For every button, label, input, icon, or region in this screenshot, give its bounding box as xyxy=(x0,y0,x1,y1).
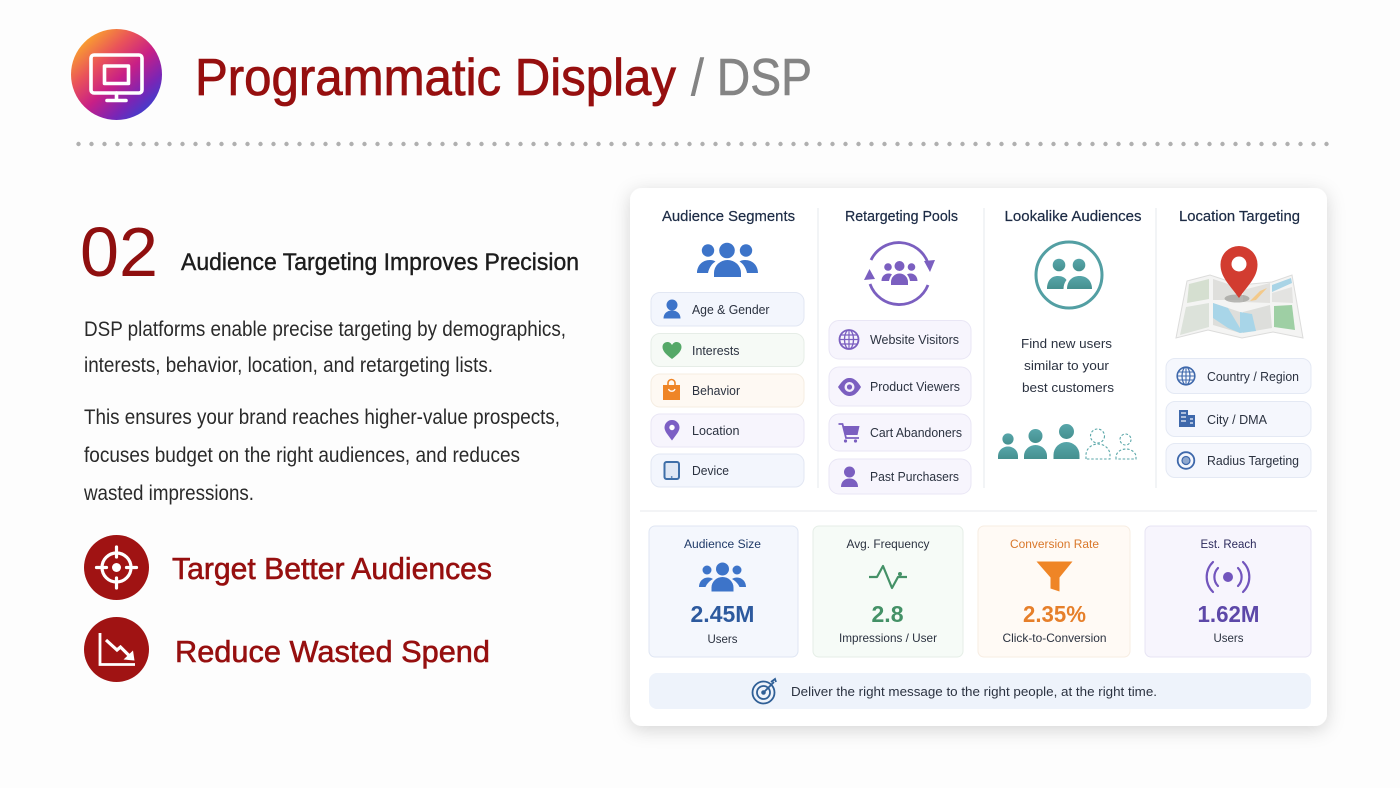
item: past purchasers: Past Purchasers xyxy=(870,469,959,484)
metric: audience size: Users xyxy=(708,632,738,646)
item: product viewers: Product Viewers xyxy=(870,379,960,394)
item: website visitors: Website Visitors xyxy=(870,332,959,347)
section number: 02 xyxy=(80,213,158,291)
heading: lookalike audiences: Lookalike Audiences xyxy=(1004,209,1142,225)
item: behavior: Behavior xyxy=(692,383,741,398)
item: past purchasers xyxy=(829,459,971,494)
item: device xyxy=(651,454,804,487)
title: Programmatic Display xyxy=(195,49,676,107)
column: lookalike audiences xyxy=(998,209,1142,459)
metric: audience size: Audience Size xyxy=(684,537,761,551)
banner: key message xyxy=(649,673,1311,709)
column: audience segments xyxy=(651,209,804,487)
icon: crosshair target xyxy=(84,535,149,600)
item: location xyxy=(651,414,804,447)
icon: audience group xyxy=(697,243,758,277)
metric: audience size xyxy=(649,526,798,657)
icon: monitor badge xyxy=(71,29,162,120)
item: cart abandoners xyxy=(829,414,971,451)
lookalike description: Find new users xyxy=(1021,336,1113,351)
paragraph one xyxy=(84,318,566,377)
lookalike description: similar to your xyxy=(1024,358,1110,373)
icon: declining chart xyxy=(84,617,149,682)
benefit: reduce wasted spend: Reduce Wasted Spend xyxy=(175,634,490,669)
metric: estimated reach: 1.62M xyxy=(1198,601,1260,627)
metric: estimated reach: Est. Reach xyxy=(1200,537,1257,551)
section heading: Audience Targeting Improves Precision xyxy=(181,249,579,276)
metric: average frequency: Impressions / User xyxy=(839,631,937,645)
benefit: target better audiences: Target Better Audiences xyxy=(172,551,492,586)
paragraph two: This ensures your brand reaches higher-value prospects, xyxy=(84,406,560,429)
item: device: Device xyxy=(692,463,729,478)
heading: audience segments: Audience Segments xyxy=(662,209,795,225)
paragraph two: wasted impressions. xyxy=(83,482,254,505)
metric: estimated reach xyxy=(1145,526,1311,657)
heading: location targeting: Location Targeting xyxy=(1179,209,1300,225)
metric: conversion rate: Conversion Rate xyxy=(1010,537,1099,551)
icon: bullseye with arrow xyxy=(752,679,776,704)
item: behavior xyxy=(651,374,804,407)
paragraph two: focuses budget on the right audiences, and reduces xyxy=(84,444,520,467)
item: interests: Interests xyxy=(692,343,740,358)
heading: retargeting pools: Retargeting Pools xyxy=(845,209,958,225)
metric: average frequency xyxy=(813,526,963,657)
panel: targeting dashboard xyxy=(630,188,1327,726)
lookalike description: best customers xyxy=(1022,380,1115,395)
paragraph one: DSP platforms enable precise targeting by demographics, xyxy=(84,318,566,341)
paragraph two xyxy=(83,406,560,505)
item: interests xyxy=(651,334,804,366)
metric: estimated reach: Users xyxy=(1214,631,1244,645)
icon: map with pin xyxy=(1176,246,1303,338)
title: / DSP xyxy=(691,49,812,107)
item: country or region: Country / Region xyxy=(1207,369,1299,384)
icon: lookalike pair xyxy=(1036,242,1102,308)
metric: average frequency: 2.8 xyxy=(872,601,904,627)
metric: audience size: 2.45M xyxy=(690,601,754,627)
metric: conversion rate: 2.35% xyxy=(1023,601,1086,627)
item: country or region xyxy=(1166,358,1311,394)
item: radius targeting: Radius Targeting xyxy=(1207,453,1299,468)
item: age and gender xyxy=(651,292,804,326)
item: product viewers xyxy=(829,367,971,406)
item: city or DMA xyxy=(1166,402,1311,436)
banner: key message: Deliver the right message to the right people, at the right time. xyxy=(791,684,1157,699)
metric: average frequency: Avg. Frequency xyxy=(846,537,930,551)
icon: retargeting cycle xyxy=(864,243,935,305)
item: website visitors xyxy=(829,320,971,359)
column: location targeting xyxy=(1166,209,1311,478)
item: cart abandoners: Cart Abandoners xyxy=(870,425,962,440)
lookalike description xyxy=(1021,336,1115,395)
icon: expanding audience row xyxy=(998,424,1136,459)
paragraph one: interests, behavior, location, and retargeting lists. xyxy=(84,354,493,377)
metric: conversion rate xyxy=(978,526,1130,657)
item: city or DMA: City / DMA xyxy=(1207,412,1267,427)
column: retargeting pools xyxy=(829,209,971,494)
item: age and gender: Age & Gender xyxy=(692,302,770,317)
metric: conversion rate: Click-to-Conversion xyxy=(1002,631,1106,645)
item: location: Location xyxy=(692,423,740,438)
item: radius targeting xyxy=(1166,444,1311,478)
